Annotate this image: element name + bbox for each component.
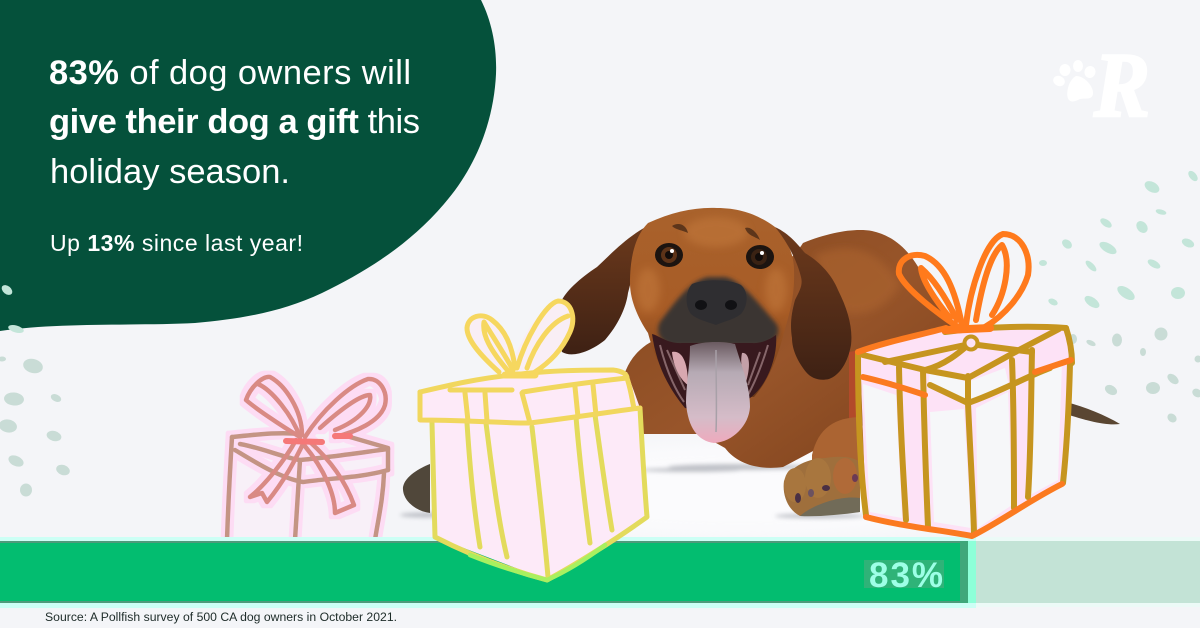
forehead shading [636, 217, 787, 312]
right ear [775, 227, 851, 380]
reddish edge by gift [849, 350, 862, 422]
bar: halo [0, 537, 976, 608]
gum left [672, 352, 688, 385]
orange accents [858, 328, 1071, 536]
body [624, 230, 965, 468]
logo: paw and R [1051, 34, 1150, 136]
bar label backing [864, 560, 944, 588]
nose [687, 280, 747, 325]
outline with halo [227, 377, 388, 540]
bow knot [964, 336, 978, 350]
bow fill [467, 302, 571, 372]
tongue [686, 342, 750, 443]
bar: fill 83% [0, 541, 960, 603]
lid lines [420, 370, 640, 423]
gift: pink [227, 377, 388, 540]
panel: dark green blob [0, 0, 496, 331]
dog shadow [400, 464, 865, 518]
dots on blob edge [0, 283, 25, 334]
headline line 3: holiday season. [50, 153, 290, 191]
bow lines [467, 301, 573, 375]
source note: Source: A Pollfish survey of 500 CA dog owners in October 2021. [45, 610, 397, 624]
body highlight [815, 248, 900, 314]
headline line 2: give their dog a gift this [49, 103, 420, 141]
lips and teeth [660, 345, 768, 402]
headline: 83% of dog owners will [49, 54, 411, 92]
logo letter: R [1093, 34, 1150, 136]
bow lines [246, 377, 386, 513]
paw toes [784, 457, 860, 516]
subheading: Up 13% since last year! [50, 230, 303, 256]
white panels [863, 362, 1062, 528]
left eye [655, 243, 683, 267]
head [630, 208, 794, 397]
bar overlap glow [470, 545, 605, 580]
gift: orange [857, 234, 1072, 536]
photo: dog [400, 208, 1120, 518]
bar: top edge [0, 541, 960, 543]
gift: yellow [420, 301, 647, 580]
bar: bright tip [968, 541, 976, 603]
far paw [403, 464, 430, 513]
bar: bottom edge [0, 601, 960, 603]
leg [812, 417, 866, 470]
mouth [652, 334, 776, 410]
brows [672, 224, 760, 240]
bar: track [976, 541, 1200, 603]
box lines [227, 433, 388, 540]
box lines [432, 408, 647, 580]
bar label: 83% [869, 556, 943, 595]
gum right [741, 353, 749, 382]
bar: dark tip [960, 541, 968, 603]
gift fill [857, 326, 1072, 536]
dots: right scatter [1039, 169, 1200, 424]
gift fill [228, 433, 388, 540]
muzzle [658, 277, 778, 346]
tongue centre line [715, 350, 717, 432]
bar: right halo [976, 537, 1200, 607]
right eye [746, 245, 774, 269]
gift fill [420, 372, 647, 580]
dots: left scatter [0, 356, 71, 496]
box lines [858, 327, 1072, 533]
tail [1066, 402, 1120, 424]
floor glow under dog [480, 442, 1000, 538]
nostrils [695, 300, 737, 310]
left ear [559, 223, 654, 354]
bow knot [286, 436, 350, 442]
bow [899, 234, 1029, 330]
icon: paw [1051, 60, 1097, 102]
